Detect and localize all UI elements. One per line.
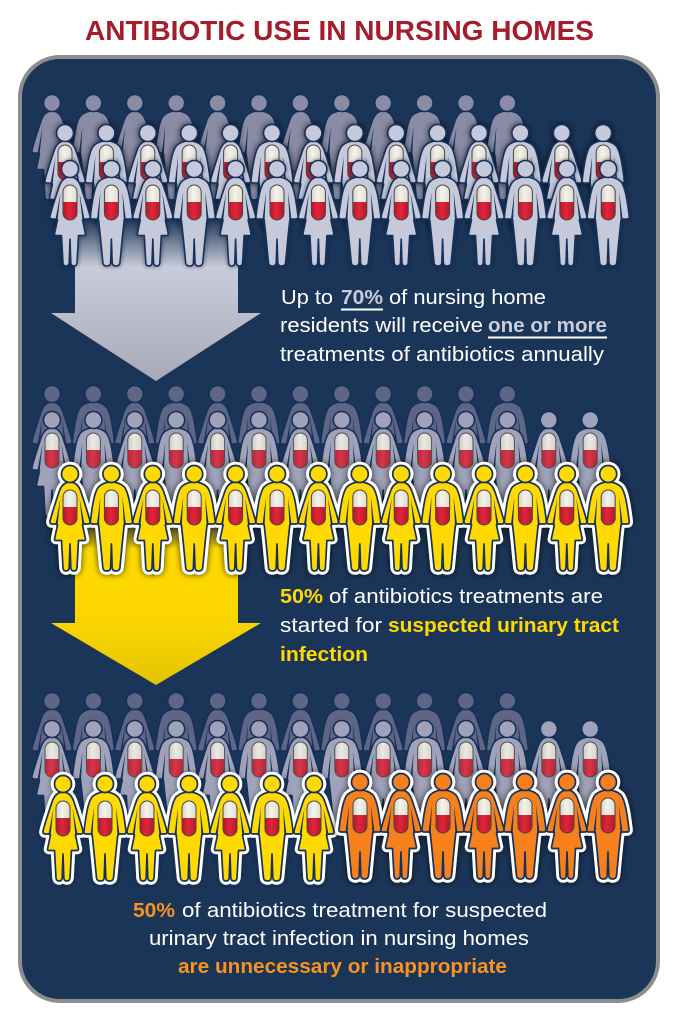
title: ANTIBIOTIC USE IN NURSING HOMES — [85, 15, 594, 46]
text block: 50 percent suspected UTI: infection — [280, 643, 368, 666]
back row of residents — [32, 692, 528, 798]
text block: 50 percent unnecessary or inappropriate: urinary tract infection in nursing homes — [149, 927, 529, 950]
middle row of residents with capsules — [32, 412, 611, 517]
middle row of residents with capsules — [45, 124, 624, 230]
front row of residents with capsules — [50, 160, 629, 266]
section 3: unnecessary treatments — [32, 692, 629, 881]
underline: one or more — [488, 336, 607, 338]
text block: 70 percent receive antibiotics: one or more — [488, 314, 607, 337]
front row of yellow residents — [50, 466, 629, 571]
arrow: grey down arrow — [51, 218, 261, 381]
text block: 70 percent receive antibiotics: treatments of antibiotics annually — [280, 343, 605, 366]
text block: 50 percent unnecessary or inappropriate: 50% — [133, 899, 175, 922]
back row of residents — [32, 386, 528, 491]
section 1: all residents — [32, 94, 629, 381]
arrow: yellow down arrow — [51, 515, 261, 685]
text block: 70 percent receive antibiotics: 70% — [341, 286, 383, 309]
section 2: suspected urinary tract infection — [32, 386, 629, 685]
text block: 70 percent receive antibiotics: residents will receive — [280, 314, 483, 337]
underline: 70% — [341, 308, 383, 310]
text block: 70 percent receive antibiotics: of nursing home — [389, 286, 546, 309]
front row: orange residents — [339, 774, 629, 879]
text block: 50 percent suspected UTI: started for — [280, 614, 382, 637]
text block: 50 percent suspected UTI: of antibiotics treatments are — [329, 585, 603, 608]
back row of residents — [32, 94, 528, 200]
text block: 50 percent unnecessary or inappropriate: of antibiotics treatment for suspected — [182, 899, 547, 922]
middle row of residents with capsules — [32, 720, 611, 826]
text block: 50 percent unnecessary or inappropriate: are unnecessary or inappropriate — [178, 955, 507, 978]
text block: 70 percent receive antibiotics: Up to — [281, 286, 333, 309]
text block: 50 percent suspected UTI: 50% — [280, 585, 323, 608]
front row: yellow residents — [43, 776, 334, 881]
text block: 50 percent suspected UTI: suspected urinary tract — [388, 614, 619, 637]
